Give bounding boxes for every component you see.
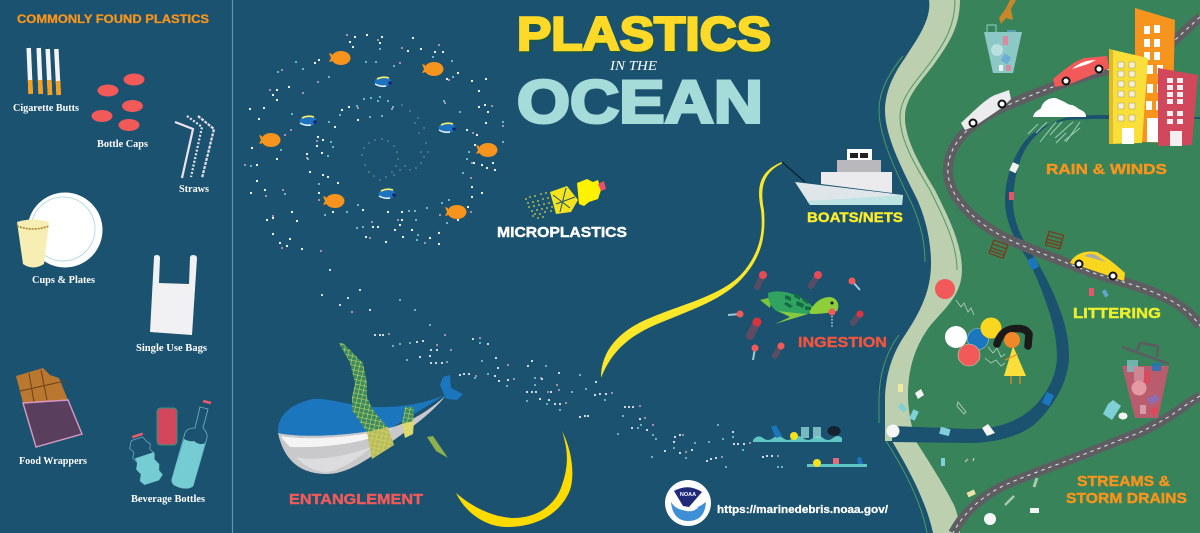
label: littering: LITTERING [1073, 305, 1161, 322]
icon: cups and plates [17, 192, 102, 268]
building: red [1158, 68, 1198, 146]
icons: scattered litter on land [898, 288, 1109, 513]
icon: boat [795, 149, 903, 205]
floating debris at surface [753, 425, 867, 467]
NOAA logo [665, 480, 711, 526]
label: streams and storm drains: STREAMS & [1077, 474, 1171, 490]
icons: plastic pieces around turtle [728, 271, 864, 360]
icon: cigarette butts [29, 48, 59, 95]
icons: orange fish [259, 51, 498, 219]
title word: plastics: PLASTICS [517, 7, 771, 60]
label: microplastics: MICROPLASTICS [497, 225, 627, 241]
label: bottle caps: Bottle Caps [97, 138, 149, 150]
icon: girl with balloons [935, 279, 1029, 384]
icon: single use bag [150, 255, 197, 335]
icon: litter beside trash can [1103, 400, 1128, 420]
title words: in the: IN THE [609, 59, 657, 74]
label: beverage bottles: Beverage Bottles [131, 493, 206, 505]
balloon bunch [945, 318, 1005, 366]
icon: hand dropping litter [999, 0, 1016, 24]
title word: ocean: OCEAN [517, 68, 763, 136]
label: cigarette butts: Cigarette Butts [13, 102, 80, 114]
icon: city buildings [1109, 8, 1198, 146]
sand shoreline [885, 0, 962, 533]
particle stream from spiral to shore [322, 270, 782, 467]
land [905, 0, 1200, 533]
icon: sea turtle with plastic [760, 291, 838, 324]
boat net line [601, 162, 805, 378]
label: rain and winds: RAIN & WINDS [1046, 161, 1167, 178]
label: straws: Straws [179, 183, 210, 195]
yellow net crescent [456, 431, 572, 527]
website url: https://marinedebris.noaa.gov/ [717, 504, 888, 516]
icon: straws [175, 116, 214, 178]
heading: commonly found plastics: COMMONLY FOUND PLASTICS [17, 14, 209, 26]
label: boats and nets: BOATS/NETS [807, 209, 903, 225]
label: entanglement: ENTANGLEMENT [289, 491, 423, 508]
label: single use bags: Single Use Bags [136, 342, 208, 354]
title [517, 7, 772, 136]
icon: full trash can [1122, 343, 1169, 418]
NOAA logo: NOAA [680, 492, 696, 498]
river / storm drain [892, 115, 1110, 443]
icons: wooden storm drains [989, 231, 1064, 258]
label: cups and plates: Cups & Plates [32, 274, 96, 286]
title word: plastics: PLASTICS [518, 8, 772, 62]
icon: yellow taxi [1070, 251, 1125, 281]
balloon on the sand [935, 279, 955, 299]
icon: microplastics bottle breaking up [526, 179, 606, 218]
icon: red car [1053, 56, 1109, 87]
icon: whale entangled in net [278, 343, 463, 474]
icons: blue fish [300, 77, 456, 199]
icon: rain cloud [1028, 98, 1086, 143]
girl [997, 329, 1029, 384]
label: food wrappers: Food Wrappers [19, 455, 88, 467]
icon: bottle caps [92, 74, 144, 131]
icons: white foam balls [886, 424, 996, 525]
icons: litter in river [939, 162, 1054, 436]
icon: beverage bottles [127, 401, 211, 488]
icon: food wrapper chocolate bar [16, 368, 82, 447]
icon: overflowing cup of litter [984, 25, 1022, 73]
road lower [953, 396, 1200, 533]
particle spiral of plastic debris [245, 35, 503, 251]
label: ingestion: INGESTION [798, 335, 887, 351]
label: streams and storm drains [1066, 474, 1187, 507]
road upper [948, 17, 1200, 326]
label: streams and storm drains: STORM DRAINS [1066, 491, 1187, 507]
building: orange [1135, 8, 1175, 143]
panel: commonly found plastics [13, 14, 214, 505]
building: yellow [1109, 49, 1148, 144]
icon: white car [961, 90, 1011, 130]
